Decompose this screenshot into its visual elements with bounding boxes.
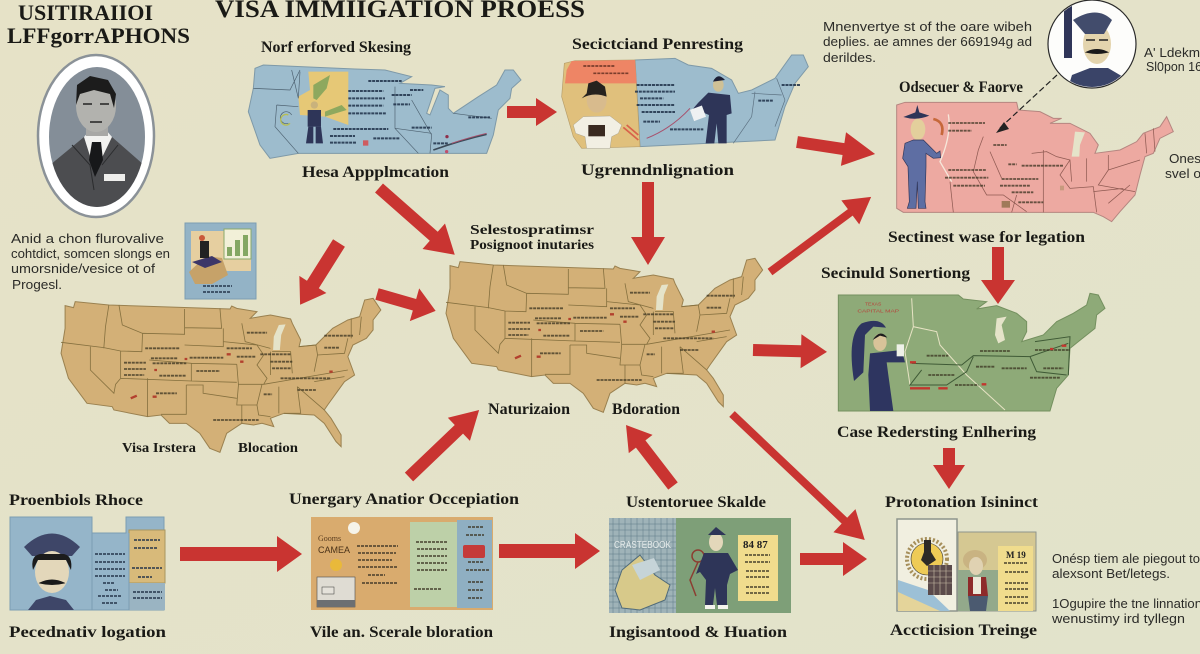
- map: green: [838, 293, 1105, 411]
- heading: proenbiols rhoce: Proenbiols Rhoce: [9, 492, 143, 509]
- title: left heading: [7, 0, 190, 48]
- text block: bottom right: wenustimy ird tyllegn: [1051, 611, 1185, 626]
- arrow: screening map to pink map: [794, 125, 878, 171]
- text block: top right: derildes.: [823, 50, 876, 65]
- panel: green card with graduate officer: 84 87: [743, 539, 768, 551]
- map: green: TEXAS: [865, 302, 882, 308]
- icon: small chart card: [185, 223, 256, 299]
- map: blue visa application: [248, 65, 521, 158]
- label: visa application: Hesa Appplmcation: [302, 164, 449, 181]
- label: visa irstera: Visa Irstera: [122, 441, 196, 456]
- map: tan left us map: [61, 298, 381, 452]
- heading: sedestospratimse: Selestospratimsr: [470, 223, 594, 238]
- text block: right edge b: svel o: [1165, 166, 1200, 181]
- text block: top right: [823, 19, 1032, 65]
- text block: right edge b: Ones: [1169, 151, 1200, 166]
- heading: secinuld sonertiong: Secinuld Sonertiong: [821, 265, 970, 282]
- arrow: green map to protonation: [933, 448, 965, 489]
- map: tan center us map: [446, 258, 763, 412]
- text block: right edge a: A' Ldekm: [1144, 45, 1200, 60]
- text block: left paragraph: cohtdict, somcen slongs en: [11, 246, 170, 261]
- panel: green card with graduate officer: [609, 518, 791, 613]
- heading: norf erforved skesing: Norf erforved Skesing: [261, 39, 411, 56]
- arrow: pink map to green map: [981, 247, 1015, 304]
- label: ingisantood and huation: Ingisantood & Huation: [609, 624, 787, 641]
- panel: sun poster and person card: [897, 519, 1036, 611]
- label: bdoration: Bdoration: [612, 401, 680, 418]
- map: screening with officers: [562, 55, 808, 148]
- arrow: screening to center map: [631, 182, 665, 265]
- text block: top right: Mnenvertye st of the oare wibeh: [823, 19, 1032, 34]
- panel: orange document: Gooms: [318, 534, 341, 543]
- label: vile an scerale bloration: Vile an. Scerale bloration: [310, 624, 493, 641]
- arrow: to left map: [287, 234, 353, 313]
- heading: unergary anatior occepiation: Unergary Anatior Occepiation: [289, 491, 519, 508]
- arrow: center map to sun poster: [721, 402, 876, 552]
- label: naturization: Naturizaion: [488, 401, 570, 418]
- map: green: CAPITAL MAP: [857, 308, 900, 314]
- heading: odsecuer and faorve: Odsecuer & Faorve: [899, 79, 1023, 96]
- arrow: center map to green map: [753, 333, 827, 369]
- callout: dashed line from round portrait to pink map: [996, 75, 1057, 133]
- text block: right edge a: [1144, 45, 1200, 74]
- icon: round officer portrait: [1048, 0, 1136, 90]
- heading: protonation isininct: Protonation Isininct: [885, 494, 1039, 511]
- text block: left paragraph: [11, 231, 170, 292]
- panel: officer card: [10, 517, 165, 610]
- arrow: officer card to orange document: [180, 536, 302, 572]
- arrow: orange document to naturization: [398, 398, 490, 489]
- text block: left paragraph: Progesl.: [12, 277, 62, 292]
- text block: bottom right: alexsont Bet/letegs.: [1052, 566, 1170, 581]
- text block: bottom right: Onésp tiem ale piegout to: [1052, 551, 1200, 566]
- heading: secictciand penresting: Secictciand Penresting: [572, 36, 743, 53]
- text block: bottom right: 1Ogupire the tne linnation: [1052, 596, 1200, 611]
- label: ugrenndnlignation: Ugrenndnlignation: [581, 162, 734, 179]
- heading: ustentoruee skalde: Ustentoruee Skalde: [626, 494, 766, 511]
- arrow: green card to sun poster: [800, 542, 867, 576]
- panel: sun poster and person card: M 19: [1006, 550, 1026, 560]
- label: pecednativ logation: Pecednativ logation: [9, 624, 166, 641]
- text block: left paragraph: Anid a chon flurovalive: [11, 231, 164, 246]
- arrow: visa application to center map: [368, 175, 466, 268]
- text block: right edge b: [1165, 151, 1200, 181]
- map: pink: [897, 102, 1173, 222]
- label: blocation: Blocation: [238, 441, 298, 456]
- heading: sedestospratimse: [470, 223, 595, 253]
- arrow: orange document to green card: [499, 533, 600, 569]
- panel: orange document: CAMEA: [318, 545, 350, 555]
- label: case redersting: Case Redersting Enlhering: [837, 424, 1036, 441]
- text block: bottom right: [1051, 551, 1200, 626]
- arrow: ustentoruee to center map: [614, 416, 685, 495]
- heading: sedestospratimse: Posignoot inutaries: [470, 238, 595, 253]
- panel: orange document: [311, 517, 493, 610]
- label: accticision treinge: Accticision Treinge: [890, 622, 1037, 639]
- arrow: center map to pink map: [761, 185, 880, 284]
- arrow: blue map to screening map: [507, 98, 557, 126]
- panel: green card with graduate officer: CRASTEBOOK: [614, 540, 671, 551]
- title: left heading: USITIRAIIOI: [18, 0, 153, 25]
- title: left heading: LFFgorrAPHONS: [7, 23, 190, 48]
- portrait: oval officer: [38, 55, 154, 217]
- arrow: left map to center map: [372, 278, 440, 327]
- label: sectinest wase: Sectinest wase for legation: [888, 229, 1085, 246]
- text block: top right: deplies. ae amnes der 669194g ad: [823, 34, 1032, 49]
- text block: left paragraph: umorsnide/vesice ot of: [11, 261, 155, 276]
